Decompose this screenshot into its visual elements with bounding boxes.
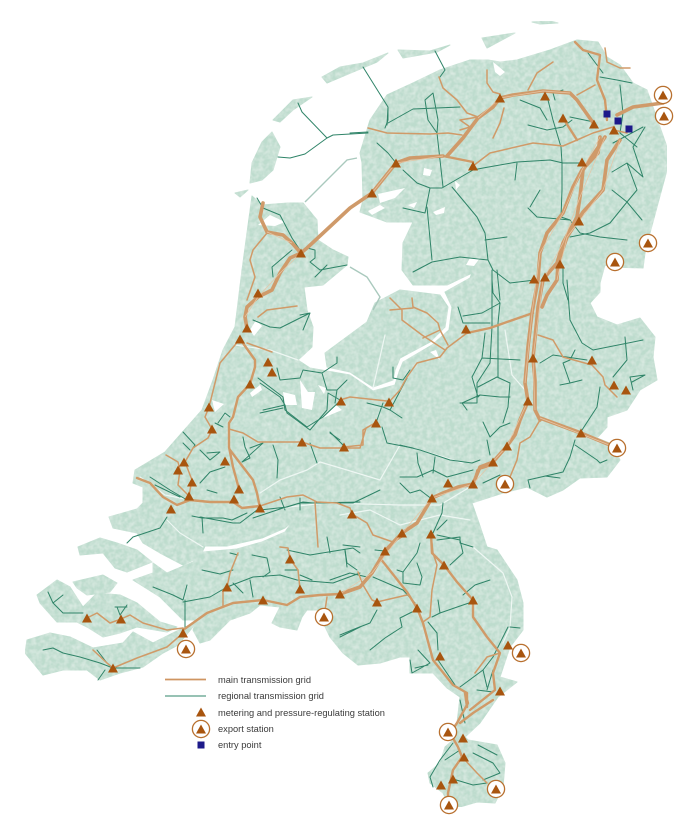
entry points — [604, 110, 632, 132]
legend: export station: export station — [218, 724, 274, 734]
land: mainland — [109, 40, 667, 807]
dikes: Afsluitdijk and Houtrib — [305, 158, 380, 310]
legend: entry point: entry point — [218, 740, 262, 750]
water: lakes and rivers — [140, 62, 525, 643]
land: Wadden island Ameland — [398, 45, 450, 58]
legend: main transmission grid: main transmission grid — [218, 675, 311, 685]
export triangles — [181, 90, 669, 810]
land: Noorderhaaks — [235, 190, 248, 197]
land: Wadden island Schiermonnikoog — [482, 33, 515, 48]
land: Noord-Beveland — [73, 575, 117, 595]
rivers — [167, 520, 203, 547]
land: Wadden island Vlieland — [273, 97, 312, 122]
lakes — [212, 62, 505, 418]
legend: metering station: metering and pressure-regulating station — [218, 708, 385, 718]
trunk line highlights — [245, 91, 620, 594]
land: Walcheren and Zuid-Beveland — [37, 580, 177, 637]
regional transmission grid — [43, 51, 645, 787]
triangles west — [166, 248, 394, 518]
land: Flevoland — [325, 290, 448, 387]
legend: regional transmission grid: regional transmission grid — [218, 691, 324, 701]
land: Schouwen-Duiveland — [78, 538, 152, 572]
medium main lines — [137, 42, 607, 805]
land: Wadden island Texel — [250, 132, 280, 183]
land: Rottumerplaat — [532, 21, 558, 24]
trunk main lines — [245, 91, 663, 594]
legend — [165, 675, 385, 750]
land: Wadden island Terschelling — [322, 53, 388, 83]
legend: entry point — [198, 740, 262, 750]
export stations — [177, 86, 673, 814]
triangles north and east — [367, 92, 631, 502]
legend: export station — [192, 720, 274, 738]
triangles south — [82, 528, 513, 790]
metering and pressure-regulating stations — [82, 92, 631, 790]
land: Zeeuws-Vlaanderen — [25, 622, 197, 680]
main transmission grid — [87, 42, 663, 805]
export rings — [177, 86, 673, 814]
thin main lines — [368, 48, 630, 166]
